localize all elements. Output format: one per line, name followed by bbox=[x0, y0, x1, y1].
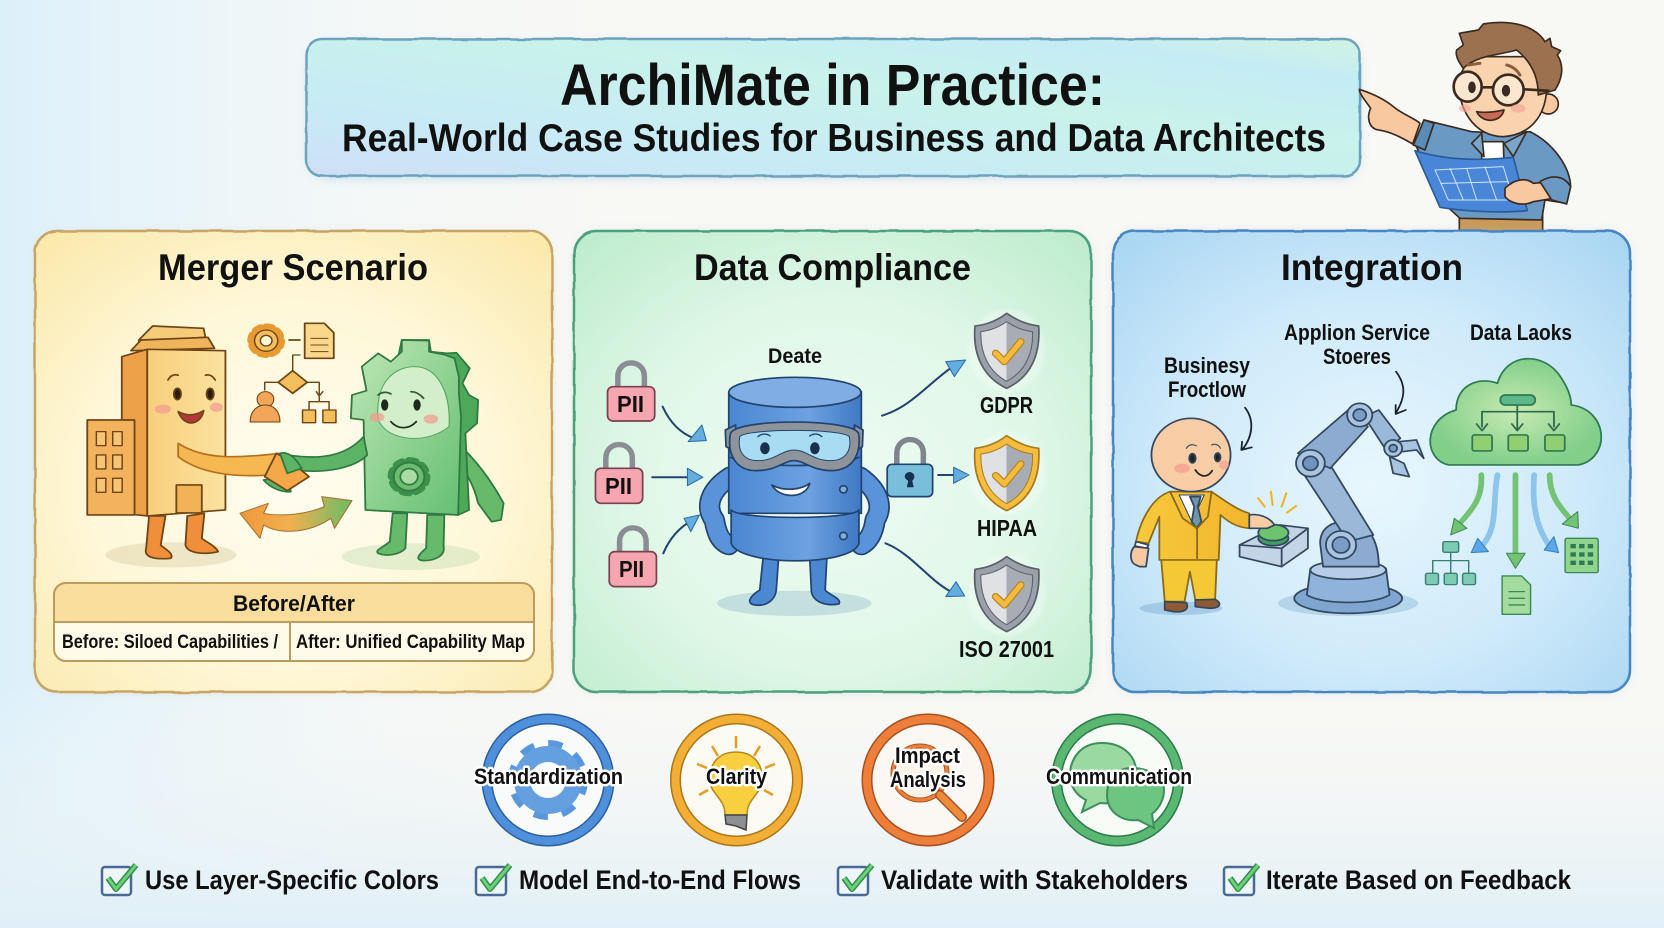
standard labels bbox=[959, 392, 1054, 662]
badge: impact analysis: Analysis bbox=[890, 767, 966, 792]
label: business workflow: Froctlow bbox=[1168, 377, 1247, 402]
heading: Integration bbox=[1281, 247, 1463, 288]
label: application service bbox=[1284, 320, 1430, 369]
checklist item 2: Model End-to-End Flows bbox=[519, 865, 801, 895]
badge: standardization: Standardization bbox=[474, 764, 623, 789]
badge: clarity: Clarity bbox=[706, 764, 768, 789]
lock labels: PII bbox=[617, 391, 644, 417]
before cell: Before: Siloed Capabilities / bbox=[62, 631, 278, 653]
title banner bbox=[306, 39, 1360, 179]
table header: Before/After bbox=[233, 591, 355, 616]
checklist item 3: Validate with Stakeholders bbox=[881, 865, 1188, 895]
standard labels: GDPR bbox=[980, 392, 1033, 418]
badge: communication bbox=[1046, 719, 1192, 841]
heading: Merger Scenario bbox=[158, 247, 428, 288]
standard labels: HIPAA bbox=[977, 515, 1037, 541]
label: data lake: Data Laoks bbox=[1470, 320, 1572, 345]
database label: Deate bbox=[768, 345, 822, 368]
badge: impact analysis: Impact bbox=[895, 743, 961, 768]
checklist item 1: Use Layer-Specific Colors bbox=[145, 865, 439, 895]
badge: clarity bbox=[676, 719, 798, 841]
panel: data compliance bbox=[574, 231, 1091, 692]
badge: impact analysis bbox=[867, 719, 989, 841]
checklist item 4: Iterate Based on Feedback bbox=[1266, 865, 1572, 895]
heading: Data Compliance bbox=[694, 247, 971, 288]
illustration: business person, robot arm and data lake cloud bbox=[1131, 359, 1601, 616]
subtitle: Real-World Case Studies for Business and Data Architects bbox=[342, 117, 1326, 160]
illustration: building and gear handshake bbox=[87, 323, 504, 570]
before/after table bbox=[54, 583, 534, 661]
illustration: database, locks, arrows and shields bbox=[595, 309, 1045, 636]
label: application service: Stoeres bbox=[1323, 344, 1391, 369]
character: architect pointing with blueprint bbox=[1359, 22, 1571, 233]
after cell: After: Unified Capability Map bbox=[296, 631, 525, 653]
panel: merger scenario bbox=[35, 231, 552, 692]
panel: integration bbox=[1113, 231, 1630, 692]
lock labels: PII bbox=[619, 556, 644, 582]
badge: standardization bbox=[474, 719, 623, 841]
lock labels: PII bbox=[605, 473, 632, 499]
label: business workflow: Businesy bbox=[1164, 353, 1251, 378]
title: ArchiMate in Practice: bbox=[560, 53, 1105, 118]
standard labels: ISO 27001 bbox=[959, 636, 1054, 662]
badge: communication: Communication bbox=[1046, 764, 1192, 789]
label: business workflow bbox=[1164, 353, 1251, 402]
lock labels bbox=[605, 391, 644, 582]
label: application service: Applion Service bbox=[1284, 320, 1430, 345]
